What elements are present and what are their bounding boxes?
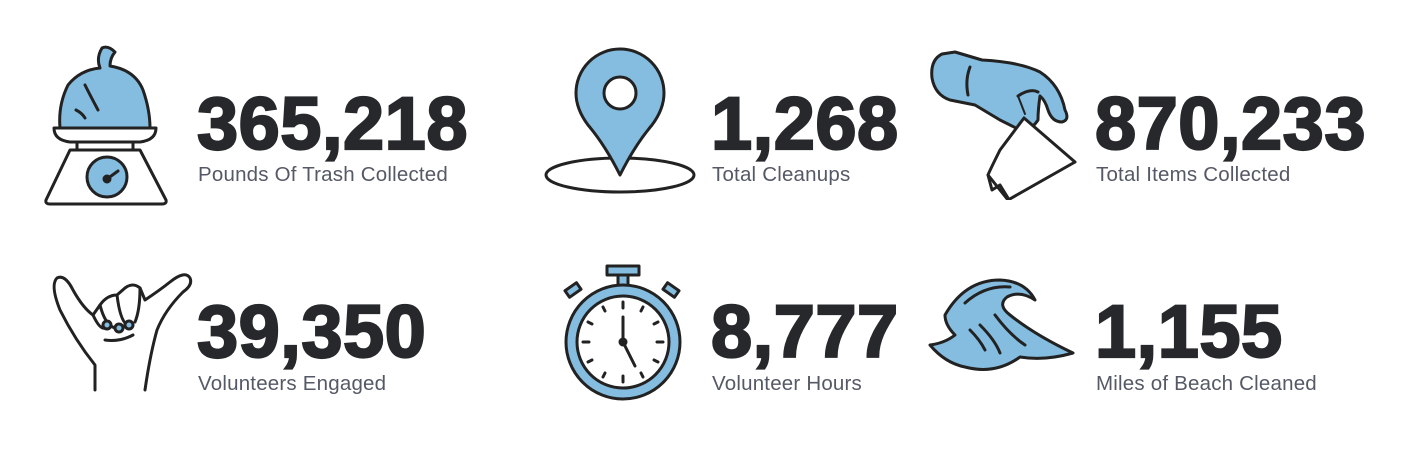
icon: location pin: [544, 48, 696, 194]
number: items: 870,233: [1095, 82, 1366, 165]
number: volunteers: 39,350: [197, 290, 426, 373]
label: hours: Volunteer Hours: [712, 372, 862, 395]
icon: gloved hand with cup: [930, 50, 1077, 200]
label: items: Total Items Collected: [1096, 163, 1290, 186]
label: miles: Miles of Beach Cleaned: [1096, 372, 1317, 395]
icon: shaka hand: [52, 273, 192, 392]
icon: stopwatch: [563, 264, 682, 400]
label: cleanups: Total Cleanups: [712, 163, 850, 186]
icon: trash bag on scale: [44, 46, 168, 206]
label: volunteers: Volunteers Engaged: [198, 372, 386, 395]
number: miles: 1,155: [1095, 290, 1283, 373]
label: pounds: Pounds Of Trash Collected: [198, 163, 448, 186]
icon: wave: [928, 278, 1074, 371]
number: pounds: 365,218: [197, 82, 468, 165]
number: hours: 8,777: [711, 290, 899, 373]
number: cleanups: 1,268: [711, 82, 899, 165]
